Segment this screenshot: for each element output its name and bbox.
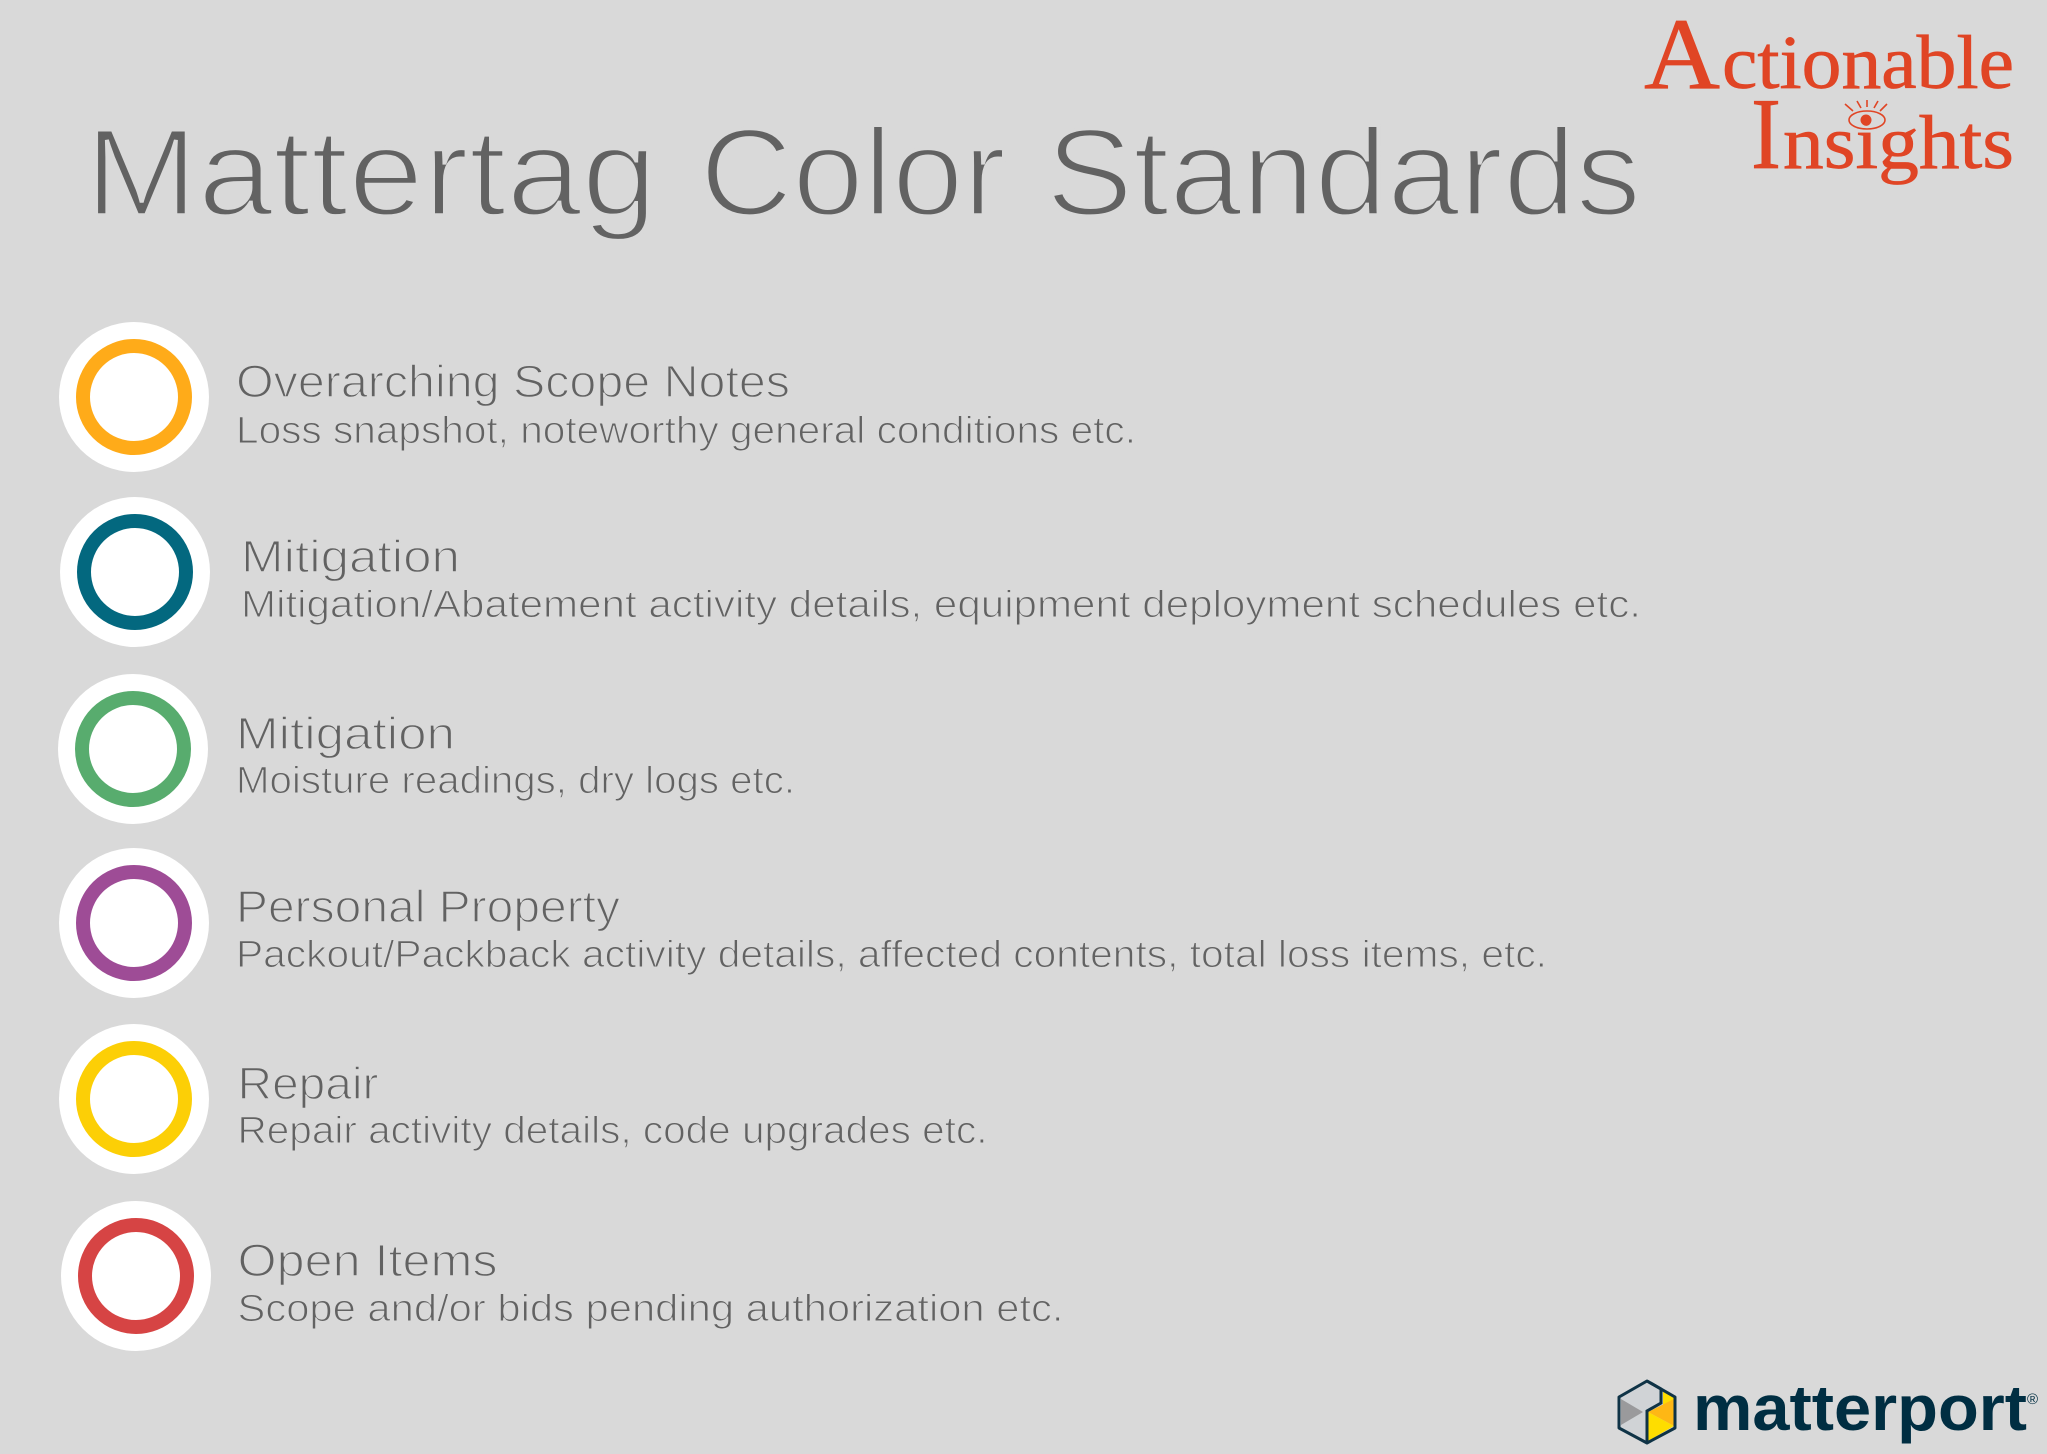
row: Repair [59, 1024, 988, 1174]
row: Personal Property [59, 848, 1547, 998]
row: Mitigation (green) [58, 674, 795, 824]
description: Repair activity details, code upgrades etc. [238, 1110, 988, 1152]
description: Scope and/or bids pending authorization etc. [238, 1288, 1064, 1330]
row: Overarching Scope Notes [59, 322, 1136, 472]
logo: Actionable Insights: nsights [1783, 101, 2014, 185]
logo: matterport [1619, 1372, 2038, 1444]
logo: Actionable Insights: I [1751, 78, 1781, 191]
icon: eye [1845, 100, 1887, 129]
title: Mattertag [85, 104, 657, 242]
logo: Actionable Insights: ctionable [1722, 21, 2014, 105]
title: Color [700, 104, 1006, 242]
description: Mitigation/Abatement activity details, equipment deployment schedules etc. [241, 584, 1641, 626]
heading: Personal Property [236, 881, 621, 932]
icon: orange ring [59, 322, 209, 472]
description: Packout/Packback activity details, affected contents, total loss items, etc. [236, 934, 1547, 976]
row: Open Items [61, 1201, 1064, 1351]
icon: yellow ring [59, 1024, 209, 1174]
heading: Mitigation [241, 531, 460, 582]
heading: Mitigation [236, 708, 455, 759]
icon: purple ring [59, 848, 209, 998]
logo: Actionable Insights [1644, 0, 2014, 191]
title [85, 104, 1641, 242]
icon: green ring [58, 674, 208, 824]
heading: Repair [238, 1058, 379, 1109]
wordmark: matterport [1693, 1372, 2027, 1444]
icon: hexagon cube [1619, 1381, 1675, 1443]
icon: red ring [61, 1201, 211, 1351]
logo: Actionable Insights: A [1644, 0, 1720, 111]
registered mark: ® [2027, 1391, 2038, 1408]
heading: Open Items [238, 1235, 498, 1286]
icon: teal ring [60, 497, 210, 647]
row: Mitigation (teal) [60, 497, 1641, 647]
description: Moisture readings, dry logs etc. [236, 760, 795, 802]
title: Standards [1046, 104, 1641, 242]
description: Loss snapshot, noteworthy general conditions etc. [236, 410, 1136, 452]
heading: Overarching Scope Notes [236, 356, 790, 407]
